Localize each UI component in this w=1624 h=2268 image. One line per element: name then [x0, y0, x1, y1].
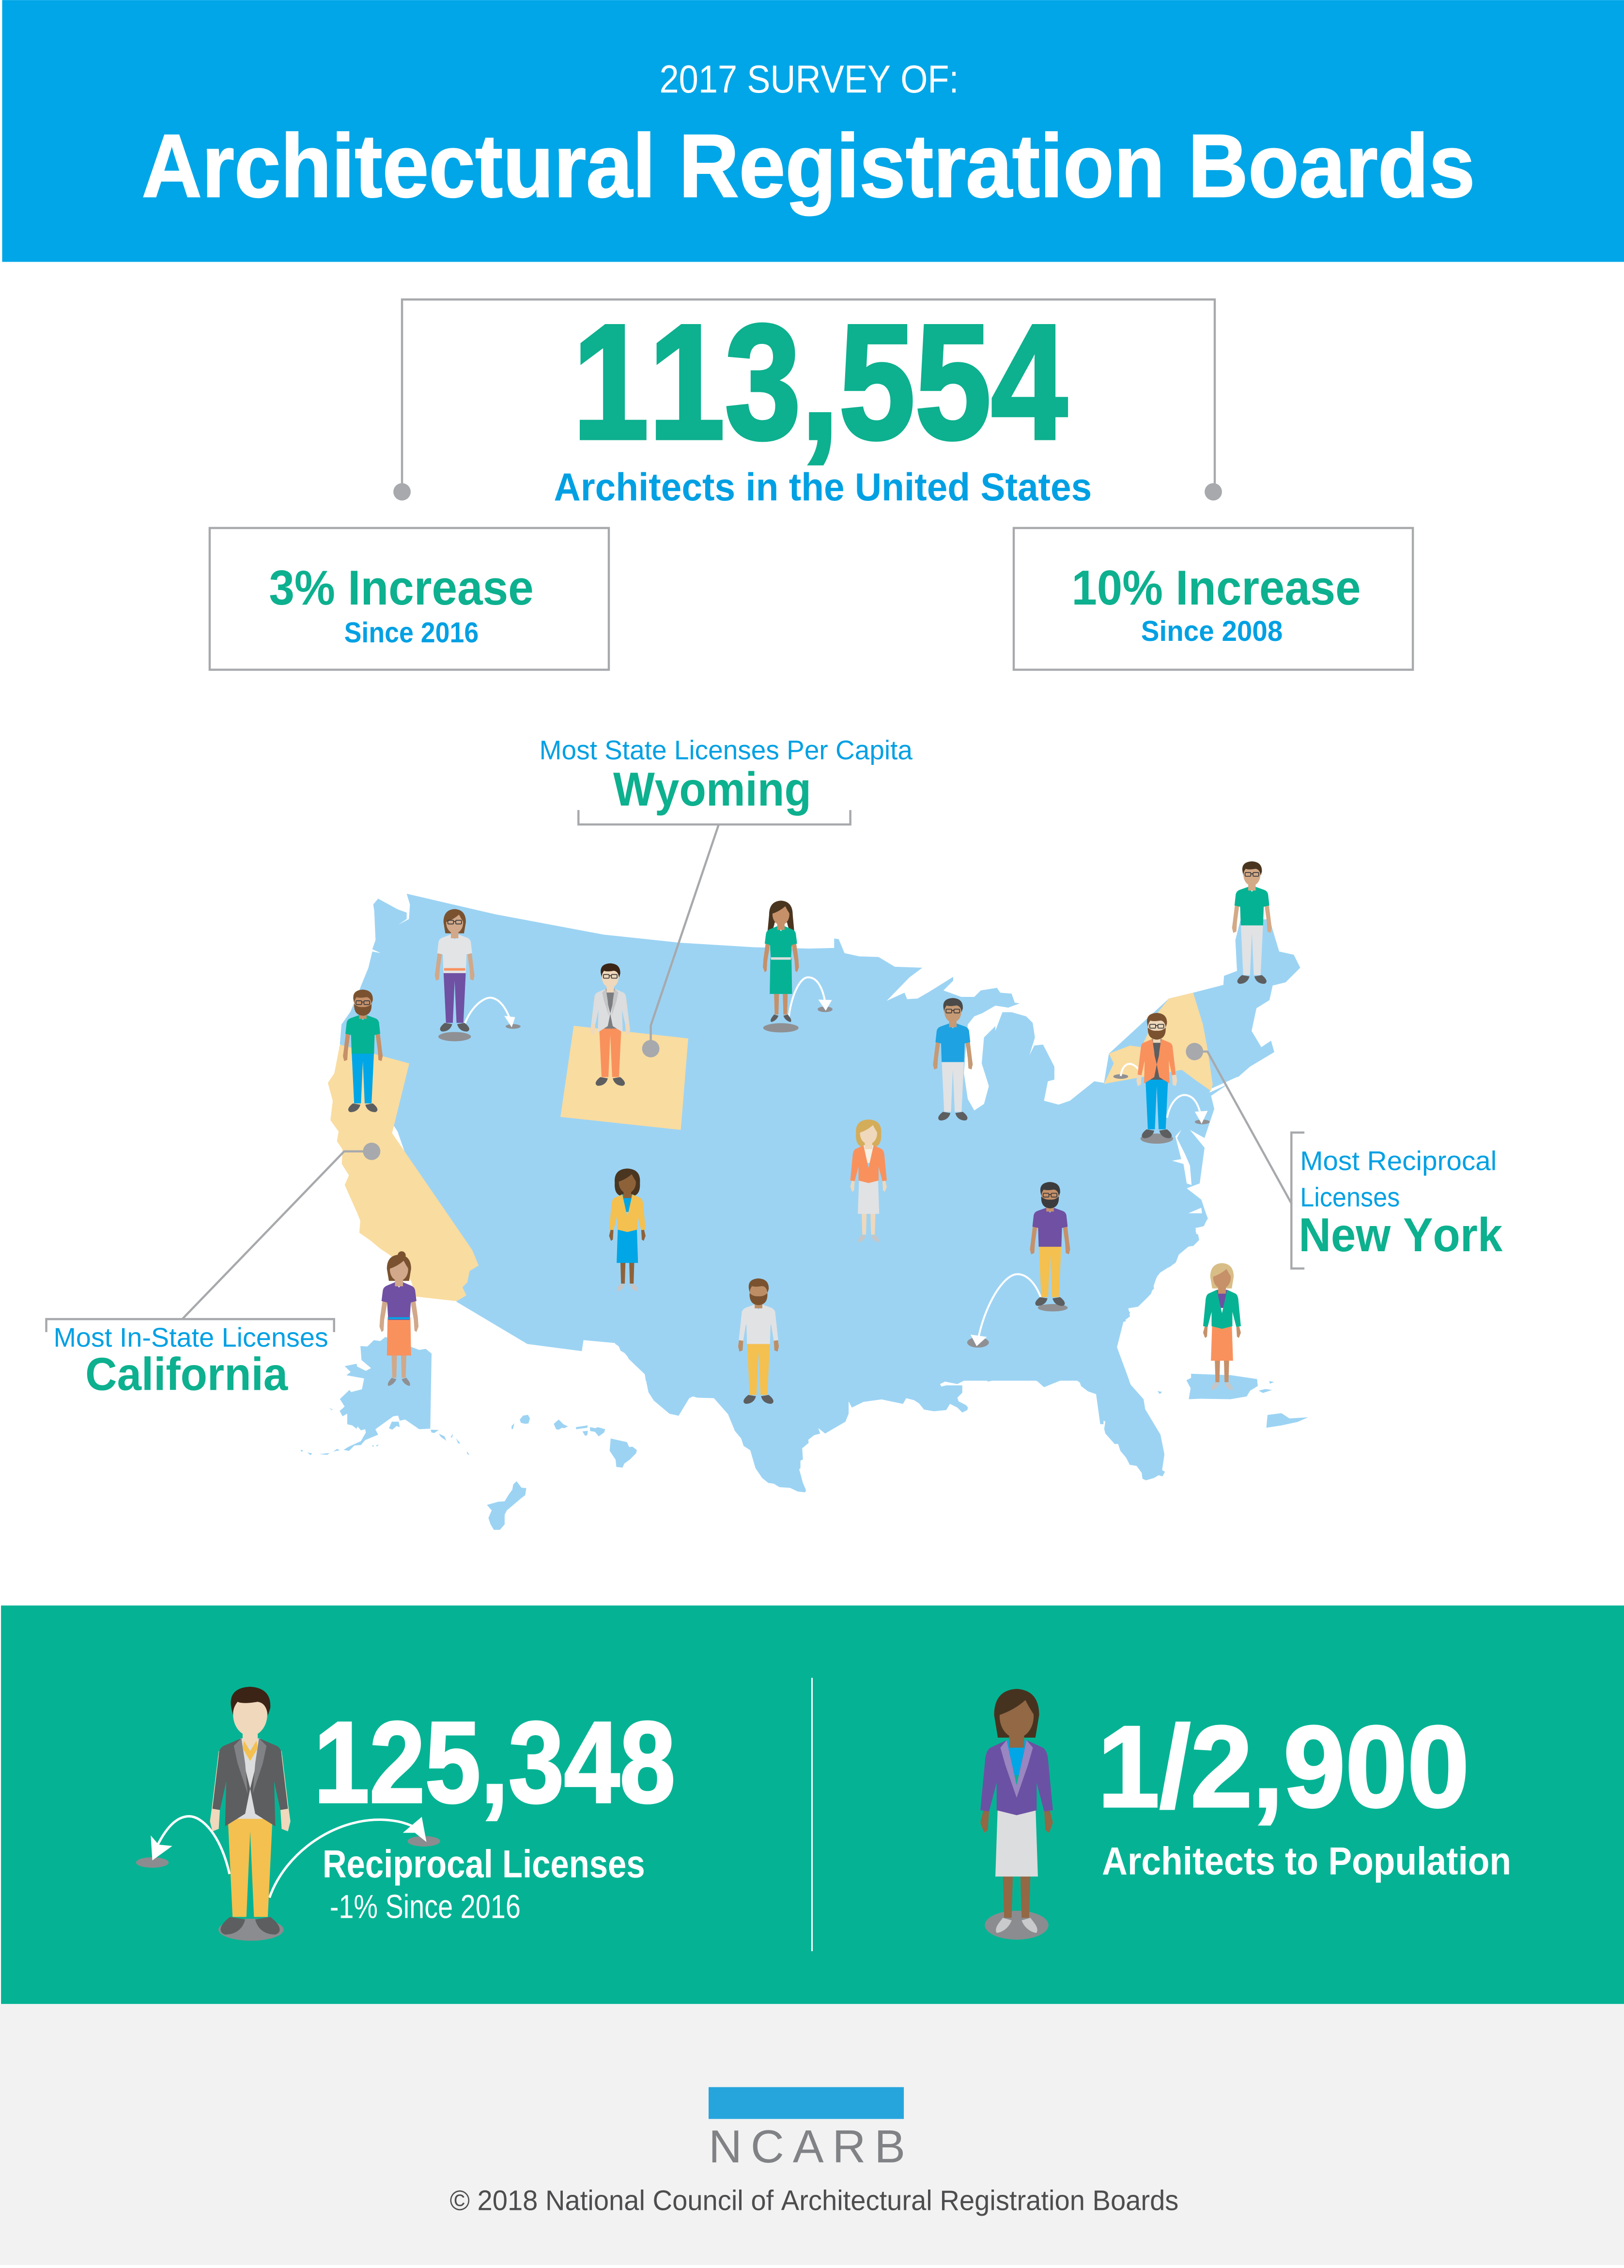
stat: reciprocal licenses [314, 1697, 675, 1925]
map of the United States [300, 894, 1308, 1530]
panel: teal statistics band [1, 1605, 1624, 2004]
man figure [210, 1687, 291, 1935]
illustration: woman in purple jacket [980, 1689, 1053, 1940]
contiguous states [340, 894, 1300, 1492]
header banner [2, 0, 1624, 262]
figure: man in grey jacket on Wyoming [590, 963, 630, 1086]
stat: reciprocal licenses: -1% Since 2016 [330, 1888, 521, 1925]
Alaska [300, 1337, 470, 1455]
stat: architects to population: 1/2,900 [1098, 1702, 1469, 1831]
stat box: 3% increase: Since 2016 [344, 616, 479, 649]
figure: woman in yellow jacket and blue skirt [609, 1168, 646, 1291]
stat box: 10% increase [1014, 528, 1413, 670]
Wyoming highlight [560, 1026, 688, 1130]
figure: woman in green jacket in Florida [1203, 1263, 1241, 1390]
NCARB logo [709, 2087, 905, 2173]
Hawaii and Guam [487, 1415, 637, 1530]
stat box: 10% increase: 10% Increase [1071, 560, 1361, 615]
headline number: 113,554 [572, 291, 1068, 473]
survey kicker: 2017 SURVEY OF: [660, 58, 959, 101]
stat: architects to population: Architects to Population [1102, 1840, 1511, 1883]
New York highlight [1104, 993, 1213, 1091]
California highlight [328, 1044, 479, 1301]
callout: New York [1291, 1133, 1502, 1269]
callout: New York: Most Reciprocal [1300, 1146, 1497, 1176]
Puerto Rico and Virgin Islands [1158, 1374, 1308, 1428]
coastal inlets: Chesapeake, Delaware, Long Island Sound [1172, 1076, 1245, 1213]
callout: Wyoming: Wyoming [613, 762, 811, 816]
stat: reciprocal licenses: Reciprocal Licenses [323, 1843, 645, 1886]
callout: New York: Licenses [1300, 1182, 1400, 1212]
figure: man in white shirt in Texas [738, 1278, 779, 1404]
NCARB logo: NCARB [709, 2121, 905, 2173]
figure: bearded man in purple shirt [1030, 1182, 1070, 1306]
figure: man in green shirt in Maine [1232, 861, 1272, 984]
title: Architectural Registration Boards [142, 116, 1475, 216]
callout: Wyoming [540, 735, 913, 824]
stat box: 10% increase: Since 2008 [1141, 615, 1283, 647]
figure: man in orange jacket on New York [1136, 1013, 1177, 1138]
callout: California: California [85, 1349, 288, 1400]
callout: California: Most In-State Licenses [53, 1322, 328, 1352]
arcs and target discs [136, 1817, 440, 1941]
callout leader lines and pins [182, 824, 1291, 1319]
headline caption: Architects in the United States [554, 466, 1092, 509]
figure: man in blue shirt [933, 998, 973, 1120]
footer panel [0, 2004, 1624, 2265]
callout: California [46, 1319, 334, 1400]
figure: blonde woman in orange jacket [851, 1119, 887, 1242]
callout: Wyoming: Most State Licenses Per Capita [540, 735, 913, 765]
stat: reciprocal licenses: 125,348 [314, 1697, 675, 1827]
stat box: 3% increase [210, 528, 609, 670]
figure: woman in purple top and orange skirt [380, 1251, 418, 1386]
figure: man in green shirt on California [343, 990, 383, 1112]
figure: woman in purple pants [435, 909, 475, 1032]
copyright: © 2018 National Council of Architectural Registration Boards [450, 2185, 1178, 2216]
figure: woman in green dress [763, 901, 799, 1022]
relocation discs and arcs [438, 978, 1210, 1348]
bracket connecting headline figure to increase boxes [393, 299, 1222, 500]
stat box: 3% increase: 3% Increase [269, 560, 534, 615]
stat: architects to population [1098, 1702, 1511, 1883]
illustration: man with reciprocal arcs [136, 1687, 440, 1941]
callout: New York: New York [1299, 1208, 1502, 1261]
